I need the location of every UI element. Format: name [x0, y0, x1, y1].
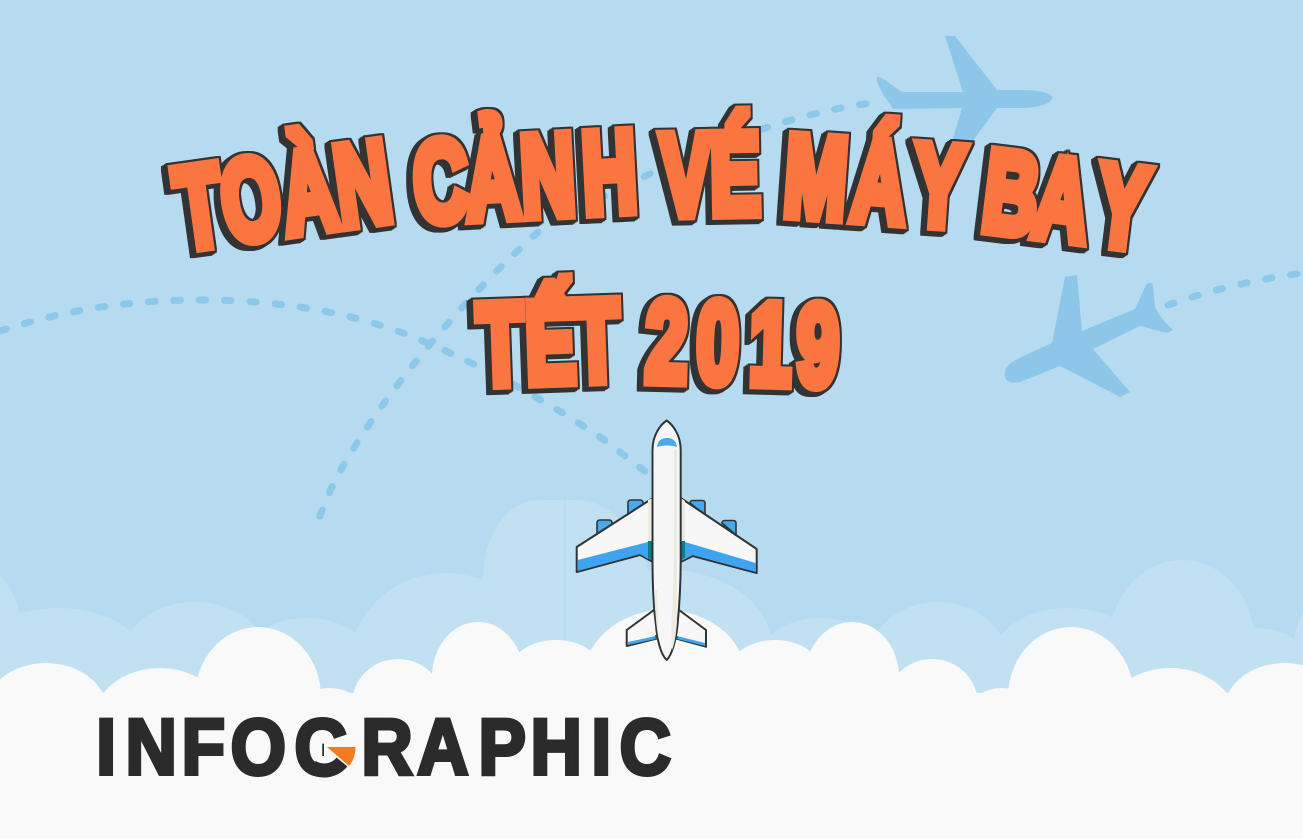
wing root shading: [648, 498, 685, 541]
wing stripes: [578, 541, 756, 572]
title word: CẢNH: CẢNH: [410, 106, 640, 247]
logo wordmark: INFOGRAPHIC: [96, 703, 671, 791]
right tail: [674, 610, 706, 647]
title word: MÁY: MÁY: [780, 110, 969, 252]
title word: VÉ: VÉ: [660, 109, 761, 240]
title: [168, 106, 1155, 410]
left wing: [577, 498, 653, 572]
plane silhouette: top right: [877, 36, 1052, 165]
fuselage: [652, 420, 681, 660]
fuselage shading: [654, 450, 677, 650]
engines: [597, 500, 736, 535]
logo lower arc of G: [312, 762, 342, 770]
left tail: [627, 610, 659, 646]
front cloud layer: [0, 610, 1303, 839]
right wing: [681, 498, 757, 573]
main airplane: [577, 420, 757, 660]
logo orange triangle: [327, 747, 356, 766]
logo G opening patch: [324, 741, 360, 778]
back cloud layer: [0, 500, 1303, 757]
title word: TOÀN: TOÀN: [168, 116, 399, 274]
flight paths: [0, 102, 1303, 516]
title word: TẾT: TẾT: [475, 275, 622, 409]
plane silhouette: right: [1005, 275, 1173, 397]
windshield: [657, 438, 677, 447]
tail stripes: [628, 635, 705, 646]
title word: 2019: 2019: [644, 276, 840, 410]
title word: BAY: BAY: [977, 126, 1155, 274]
